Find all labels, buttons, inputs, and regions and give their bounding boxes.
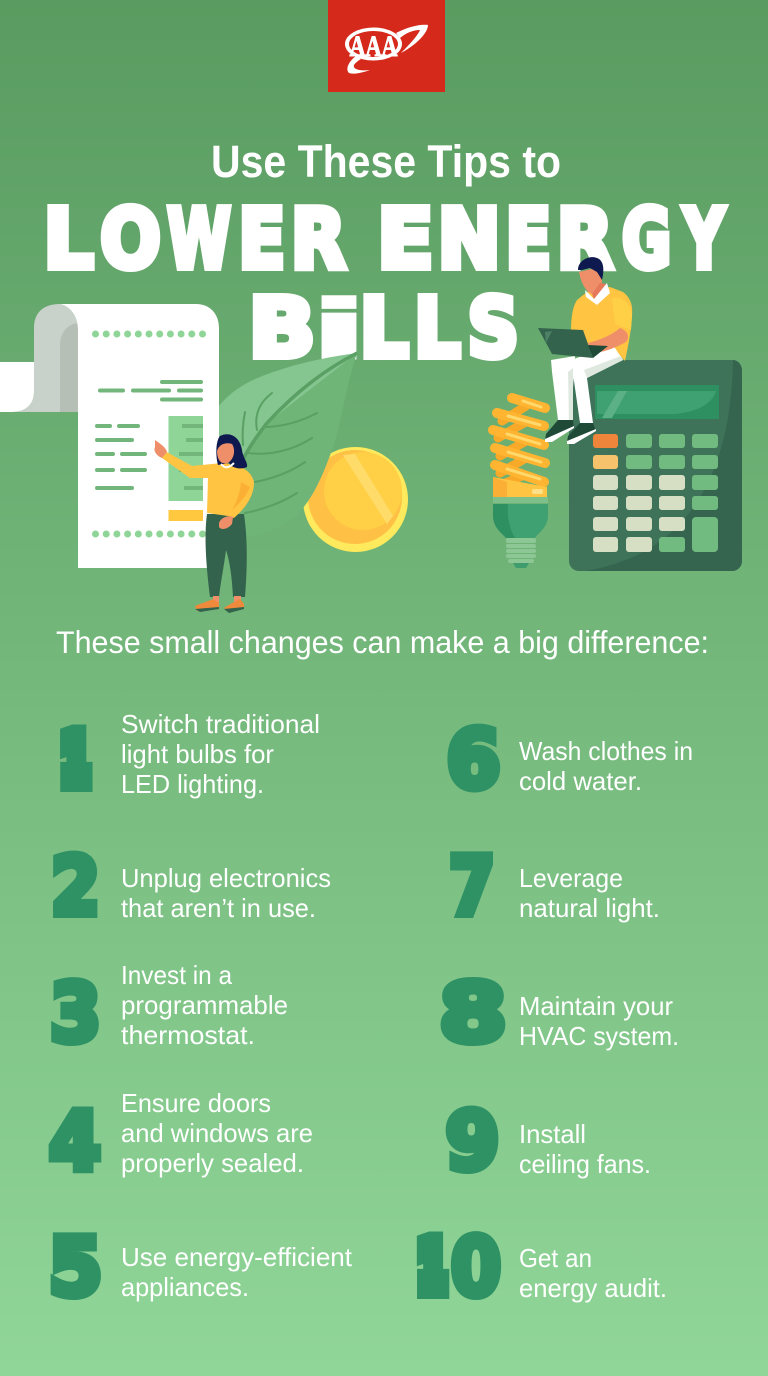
tip 7: 7 (449, 840, 495, 933)
title: BiLLS: L (360, 282, 409, 376)
tip 4: 4 (49, 1095, 101, 1188)
man shirt (571, 287, 632, 361)
tip 4: properly sealed. (121, 1148, 304, 1178)
tip 6: 6 (446, 714, 500, 806)
tip 8: HVAC system. (519, 1021, 679, 1051)
bulb screw base (506, 538, 536, 563)
tip 5: 5 (48, 1221, 102, 1314)
title: BiLLS: i (309, 284, 369, 378)
dotted rows (96, 334, 203, 534)
title: LOWER ENERGY: E (506, 192, 551, 288)
illustration: woman pointing (154, 434, 254, 613)
title: LOWER ENERGY: L (44, 192, 94, 288)
man trousers (551, 356, 575, 420)
tip 10: Get an (519, 1243, 592, 1273)
tip 7: Leverage (519, 863, 623, 893)
tip 5: Use energy-efficient (121, 1242, 353, 1272)
receipt sheet (60, 304, 219, 568)
title: LOWER ENERGY: R (291, 192, 346, 288)
tip 5: appliances. (121, 1272, 249, 1302)
tip 9: Install (519, 1119, 586, 1149)
tip 1 (62, 709, 320, 799)
receipt total bar (168, 510, 203, 521)
logo: AAA (328, 0, 445, 92)
tip 7 (449, 840, 660, 933)
receipt amount panel (168, 416, 203, 501)
tip 4: Ensure doors (121, 1088, 271, 1118)
receipt header lines (100, 382, 201, 400)
tip 8: Maintain your (519, 991, 673, 1021)
man laptop (538, 328, 593, 358)
illustration: light bulb (493, 398, 548, 568)
tip 3 (50, 960, 288, 1060)
tip 10: 0 (451, 1221, 501, 1314)
receipt curl (0, 362, 34, 412)
bulb spiral (493, 398, 545, 484)
tip 2: that aren’t in use. (121, 893, 316, 923)
tip 3: programmable (121, 990, 288, 1020)
illustration: calculator (569, 360, 742, 571)
tip 10: 1 (419, 1230, 445, 1303)
title: LOWER ENERGY: O (100, 192, 161, 288)
receipt item lines (97, 426, 145, 488)
tip 6: Wash clothes in (519, 736, 693, 766)
calculator display (595, 385, 719, 419)
title line: Use These Tips to: Use These Tips to (211, 136, 561, 187)
illustration: coin (303, 447, 408, 552)
tip 1: Switch traditional (121, 709, 320, 739)
tip 2: 2 (51, 840, 100, 933)
tip 10 (419, 1221, 667, 1314)
tip 1: light bulbs for (121, 739, 274, 769)
tip 8: 8 (440, 967, 506, 1060)
subheading: These small changes can make a big difference: (56, 624, 709, 660)
calculator keys (593, 434, 718, 552)
man shoes (545, 420, 574, 441)
tip 10: energy audit. (519, 1273, 667, 1303)
tip 6: cold water. (519, 766, 642, 796)
title: LOWER ENERGY: N (438, 192, 501, 288)
tip 3: Invest in a (121, 960, 233, 990)
illustration: leaf (205, 353, 357, 538)
tip 3: 3 (50, 967, 101, 1060)
man forearm (588, 328, 628, 353)
man head (579, 268, 602, 294)
illustration: man with laptop (538, 257, 632, 444)
tip 5 (48, 1221, 353, 1314)
tip 4 (49, 1088, 313, 1188)
tip 9 (446, 1095, 651, 1188)
title: LOWER ENERGY: R (557, 192, 613, 288)
title: LOWER ENERGY: G (622, 192, 671, 288)
tip 9: ceiling fans. (519, 1149, 651, 1179)
tip 1: 1 (62, 723, 88, 796)
tip 6 (446, 714, 693, 806)
title: LOWER ENERGY: Y (683, 192, 726, 288)
bulb collar (493, 477, 547, 497)
tip 7: natural light. (519, 893, 660, 923)
tip 2: Unplug electronics (121, 863, 331, 893)
tip 1: LED lighting. (121, 769, 264, 799)
bulb shade (493, 504, 548, 538)
tip 8 (440, 967, 679, 1060)
tip 4: and windows are (121, 1118, 313, 1148)
title: BiLLS: L (414, 282, 460, 376)
title: LOWER ENERGY: E (238, 192, 285, 288)
tip 3: thermostat. (121, 1020, 255, 1050)
tip 2 (51, 840, 331, 933)
title: BiLLS: B (248, 282, 316, 376)
title: BiLLS: S (467, 282, 519, 376)
title: LOWER ENERGY: W (167, 192, 231, 288)
illustration: receipt (0, 304, 219, 568)
title: LOWER ENERGY: E (377, 192, 434, 288)
logo: AAA: AAA (350, 30, 398, 63)
tip 9: 9 (446, 1095, 500, 1188)
